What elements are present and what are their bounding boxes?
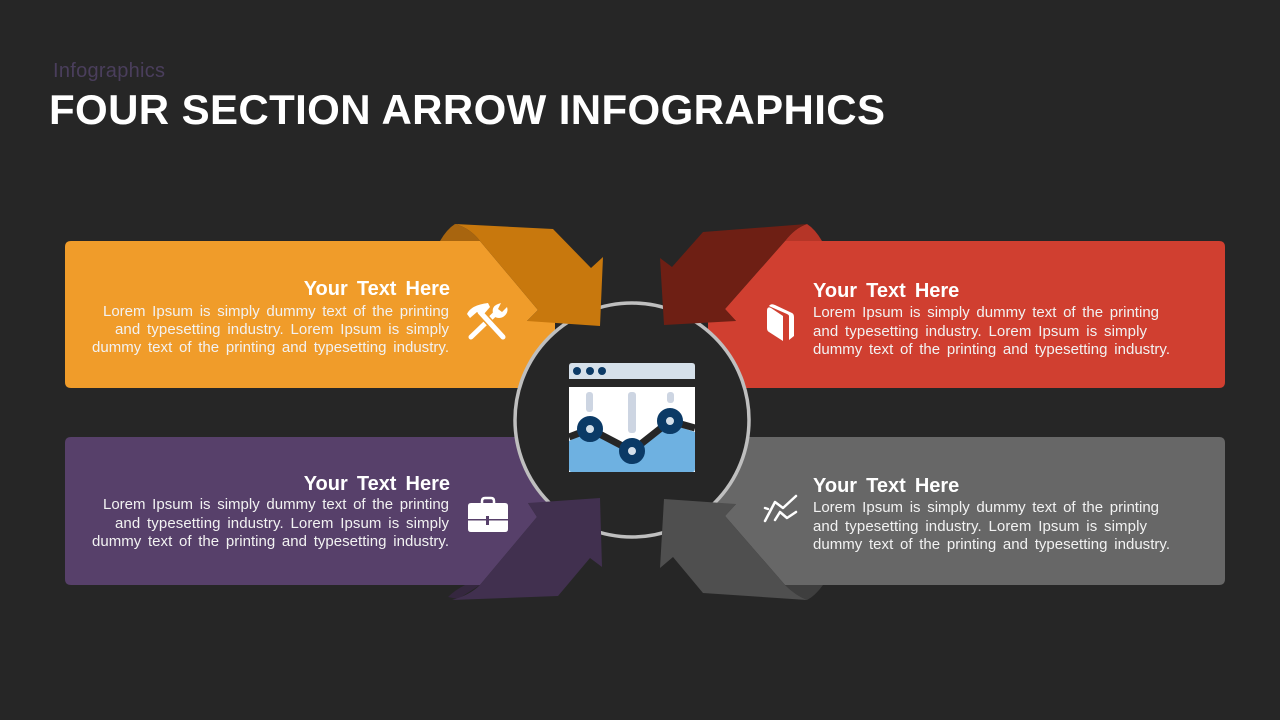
- arrow: orange: [440, 224, 603, 326]
- panel: gray: [708, 437, 1225, 585]
- arrow: gray: [660, 499, 823, 600]
- text block: orange: and typesetting industry. Lorem Ipsum is simply: [115, 321, 450, 338]
- text block: purple: dummy text of the printing and typesetting industry.: [92, 533, 449, 550]
- icon: hammer and wrench: [467, 303, 508, 337]
- text block: purple: and typesetting industry. Lorem Ipsum is simply: [115, 515, 450, 532]
- text block: gray: Lorem Ipsum is simply dummy text of the printing: [813, 499, 1159, 516]
- text block: orange: dummy text of the printing and typesetting industry.: [92, 339, 449, 356]
- text block: orange: Your Text Here: [304, 278, 450, 300]
- icon: book: [767, 304, 794, 341]
- center circle: [515, 303, 749, 537]
- subtitle: Infographics: [53, 60, 165, 82]
- text block: gray: [813, 475, 1170, 553]
- text block: purple: [92, 473, 450, 550]
- text block: gray: and typesetting industry. Lorem Ipsum is simply: [813, 518, 1148, 535]
- text block: red: and typesetting industry. Lorem Ipsum is simply: [813, 323, 1148, 340]
- text block: orange: Lorem Ipsum is simply dummy text of the printing: [103, 303, 449, 320]
- text block: red: [813, 280, 1170, 358]
- center icon: browser chart: [569, 363, 695, 472]
- text block: red: Your Text Here: [813, 280, 959, 302]
- title: FOUR SECTION ARROW INFOGRAPHICS: [49, 86, 885, 133]
- text block: red: Lorem Ipsum is simply dummy text of the printing: [813, 304, 1159, 321]
- text block: gray: dummy text of the printing and typesetting industry.: [813, 536, 1170, 553]
- panel: orange: [65, 241, 555, 388]
- text block: purple: Lorem Ipsum is simply dummy text of the printing: [103, 496, 449, 513]
- panel: red: [708, 241, 1225, 388]
- text block: orange: [92, 278, 450, 356]
- icon: trend lines: [765, 496, 796, 521]
- text block: red: dummy text of the printing and typesetting industry.: [813, 341, 1170, 358]
- arrow: red: [660, 224, 822, 325]
- text block: purple: Your Text Here: [304, 473, 450, 495]
- text block: gray: Your Text Here: [813, 475, 959, 497]
- icon: briefcase: [468, 498, 508, 532]
- arrow: purple: [448, 498, 602, 600]
- panel: purple: [65, 437, 555, 585]
